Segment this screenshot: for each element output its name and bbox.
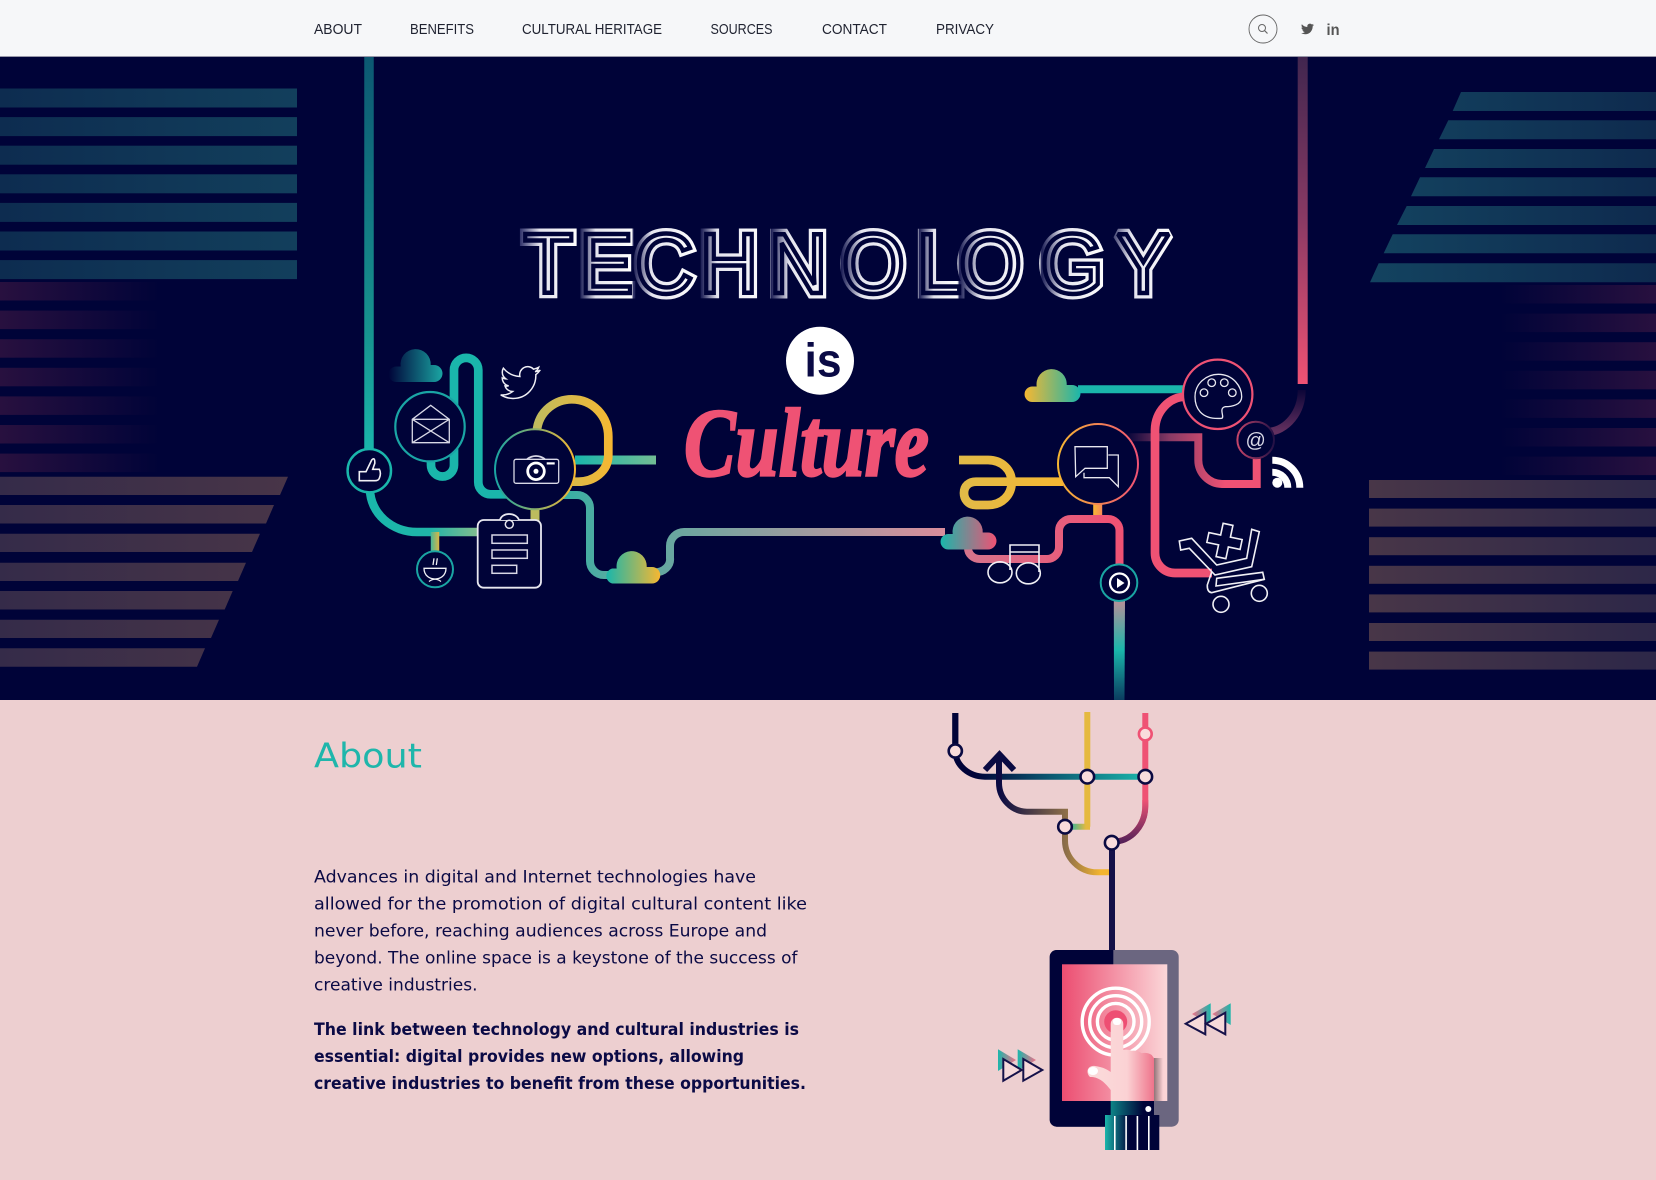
- metro line diagram: [955, 712, 1145, 952]
- heading: About: About: [314, 737, 422, 777]
- bold text paragraph: creative industries to benefit from these opportunities.: [314, 1074, 806, 1094]
- icon: envelope: [395, 392, 465, 461]
- metro station nodes: [949, 728, 1152, 850]
- navigation bar: PRIVACY: [936, 22, 994, 38]
- icon: at sign: @: [1246, 430, 1266, 452]
- left network lines: [369, 57, 945, 575]
- icon: at sign: [1237, 422, 1274, 458]
- decorative stripes: top left: [0, 88, 297, 279]
- icon: thumbs up: [348, 449, 391, 492]
- hero background: [0, 57, 1656, 700]
- decorative stripes: bottom right: [1369, 480, 1656, 670]
- cloud: dark teal: [389, 349, 442, 382]
- icon: shopping cart: [1179, 521, 1267, 612]
- decorative stripes: left purple: [0, 282, 170, 472]
- fast-forward arrows: [998, 1049, 1042, 1081]
- icon: play button: [1101, 564, 1137, 601]
- icon: camera: [495, 429, 575, 509]
- decorative stripes: top right: [1370, 92, 1656, 282]
- cloud: teal to yellow: [606, 551, 660, 584]
- decorative stripes: bottom left: [0, 477, 288, 667]
- body text paragraph: Advances in digital and Internet technologies have: [314, 868, 756, 888]
- badge: is: [786, 327, 854, 395]
- rewind arrows: [1186, 1003, 1231, 1034]
- icon: coffee cup: [417, 551, 453, 587]
- headline: Culture: Culture: [684, 390, 929, 496]
- icon: chat bubbles: [1058, 424, 1138, 504]
- icon: music notes: [988, 545, 1040, 584]
- navigation bar: SOURCES: [710, 22, 772, 38]
- bold text paragraph: [314, 1020, 806, 1094]
- body text paragraph: allowed for the promotion of digital cultural content like: [314, 895, 807, 915]
- navigation bar: [0, 0, 1656, 58]
- body text paragraph: creative industries.: [314, 976, 478, 996]
- icon: palette: [1183, 360, 1252, 429]
- body text paragraph: never before, reaching audiences across Europe and: [314, 922, 767, 942]
- bold text paragraph: essential: digital provides new options, allowing: [314, 1047, 744, 1067]
- navigation bar: in: [1326, 22, 1340, 39]
- navigation bar: CULTURAL HERITAGE: [522, 22, 662, 38]
- body text paragraph: beyond. The online space is a keystone of the success of: [314, 949, 799, 969]
- right network lines: [959, 57, 1303, 700]
- navigation bar: CONTACT: [822, 22, 887, 38]
- title: TECHNOLOGY: TECHNOLOGY: [523, 216, 1171, 311]
- icon: clipboard: [478, 514, 541, 588]
- bold text paragraph: The link between technology and cultural industries is: [314, 1020, 799, 1040]
- tablet with touching hand: [1050, 950, 1179, 1150]
- cloud: yellow to teal: [1025, 369, 1080, 402]
- decorative stripes: right purple: [1500, 285, 1656, 475]
- navigation bar: ABOUT: [314, 22, 362, 38]
- cloud: teal to pink: [941, 517, 996, 550]
- navigation bar: BENEFITS: [410, 22, 474, 38]
- icon: rss feed: [1272, 460, 1300, 488]
- badge: is: is: [804, 334, 842, 387]
- icon: twitter bird: [501, 367, 540, 398]
- body text paragraph: [314, 868, 807, 996]
